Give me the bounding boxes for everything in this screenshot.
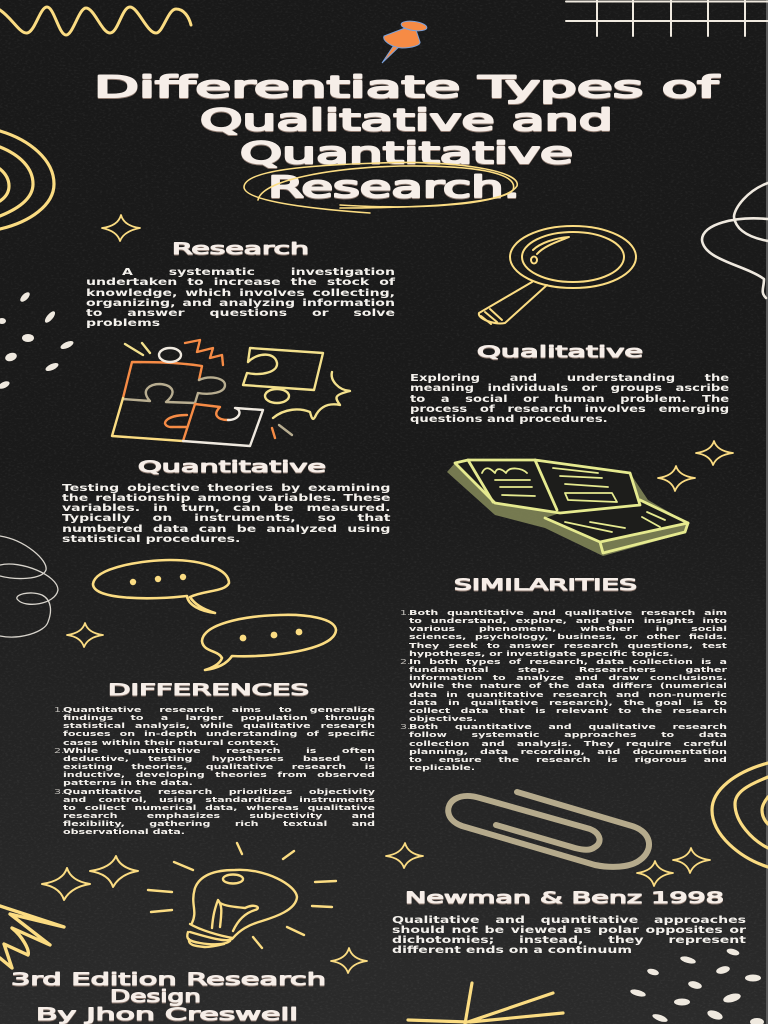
text: differences list: existing theories, qualitative research is	[63, 762, 375, 771]
text: differences list: deductive, testing hypotheses based on	[63, 754, 375, 763]
text: qualitative definition: process of research involves emerging	[410, 404, 729, 415]
text: 3.	[54, 787, 65, 796]
icon: jigsaw puzzle	[112, 340, 350, 446]
text: quantitative definition: Testing objective theories by examining	[62, 482, 390, 494]
icon: white dashes left	[0, 291, 75, 390]
text: similarities list: various phenomena, whether in social	[409, 624, 727, 633]
speech bubble upper	[93, 560, 229, 613]
text: differences list	[54, 705, 375, 836]
text: qualitative definition: to a social or human problem. The	[410, 394, 729, 405]
text: quantitative definition: variables. in turn, can be measured.	[62, 503, 390, 514]
text: similarities list	[400, 608, 727, 772]
title: Differentiate Types of	[94, 70, 720, 104]
icon: orange push pin	[382, 20, 427, 63]
heading: book credit	[11, 970, 326, 1024]
icon: yellow scribble bottom left	[0, 906, 64, 968]
text: differences list: to collect numerical data, whereas qualitative	[63, 803, 375, 812]
text: differences list: patterns in the data.	[63, 778, 193, 787]
text: similarities list: information to analyze and draw conclusions.	[409, 673, 727, 682]
text: similarities list: sciences, psychology, business, or other fields.	[409, 632, 727, 641]
icon: magnifying glass	[479, 226, 636, 324]
text: similarities list: They seek to answer research questions, test	[409, 641, 727, 650]
heading: book credit: 3rd Edition Research	[11, 970, 326, 990]
text: Newman and Benz note: Qualitative and quantitative approaches	[392, 914, 746, 926]
text: similarities list: In both types of research, data collection is a	[409, 657, 727, 666]
heading: Differences: DIFFERENCES	[108, 680, 309, 699]
text: 2.	[400, 657, 411, 666]
text: research definition: problems	[86, 318, 160, 329]
title: Quantitative	[240, 136, 573, 170]
text: quantitative definition: the relationship among variables. These	[62, 493, 390, 504]
text: differences list: Quantitative research aims to generalize	[63, 705, 375, 714]
text: quantitative definition: numbered data can be analyzed using	[62, 524, 390, 535]
text: differences list: focuses on in-depth understanding of specific	[63, 729, 375, 738]
text: research definition: organizing, and analyzing information	[86, 298, 395, 309]
icon: concentric arcs left	[0, 131, 54, 229]
text: qualitative definition: meaning individuals or groups ascribe	[410, 383, 729, 394]
speech bubble lower	[202, 615, 336, 670]
text: similarities list: collection and analysis. They require careful	[409, 738, 727, 748]
icon: light bulb	[148, 843, 336, 948]
text: similarities list: to ensure the research is rigorous and	[409, 755, 727, 764]
text: Newman and Benz note	[392, 914, 746, 956]
text: similarities list: Both quantitative and qualitative research	[409, 722, 727, 731]
text: differences list: cases within their natural context.	[63, 738, 279, 747]
title	[94, 70, 720, 204]
text: Newman and Benz note: dichotomies; instead, they represent	[392, 935, 746, 946]
text: quantitative definition: Typically on instruments, so that	[62, 513, 390, 524]
heading: Quantitative: Quantitative	[138, 457, 326, 476]
icon: white scribble right	[702, 183, 768, 298]
text: similarities list: replicable.	[409, 763, 475, 772]
text: similarities list: fundamental step. Researchers gather	[409, 665, 727, 674]
text: qualitative definition: questions and procedures.	[410, 414, 608, 425]
icon: burst lines bottom	[408, 983, 563, 1024]
text: similarities list: objectives.	[409, 714, 477, 723]
text: 1.	[54, 705, 65, 714]
scribble circle around Research	[244, 162, 517, 213]
text: differences list: findings to a larger population through	[63, 713, 375, 722]
text: differences list: flexibility, gathering rich textual and	[63, 819, 375, 828]
text: research definition: to answer questions or solve	[86, 308, 395, 319]
icon: sparkle stars	[42, 215, 733, 973]
icon: thin white scribble left	[0, 536, 58, 637]
text: differences list: research emphasizes subjectivity and	[63, 811, 375, 820]
text: differences list: While quantitative research is often	[63, 746, 375, 755]
text: similarities list: follow systematic approaches to data	[409, 730, 727, 739]
text: similarities list: data in qualitative research), the goal is to	[409, 698, 727, 707]
text: similarities list: While the nature of the data differs (numerical	[409, 681, 727, 690]
text: Newman and Benz note: should not be viewed as polar opposites or	[392, 925, 746, 936]
text: 2.	[54, 746, 65, 755]
text: quantitative definition: statistical procedures.	[62, 534, 240, 545]
text: research definition: knowledge, which involves collecting,	[86, 288, 395, 299]
text: differences list: inductive, developing theories from observed	[63, 770, 375, 779]
icon: concentric arcs right	[712, 763, 768, 867]
heading: Newman and Benz 1998: Newman & Benz 1998	[405, 888, 724, 907]
text: similarities list: data in quantitative research and non-numeric	[409, 690, 727, 699]
text: similarities list: hypotheses, or investigate specific topics.	[409, 649, 673, 658]
text: differences list: statistical analysis, while qualitative research	[63, 721, 375, 730]
icon: grid top right	[566, 0, 768, 36]
text: similarities list: planning, data recording, and documentation	[409, 747, 727, 756]
title: Qualitative and	[200, 103, 613, 137]
text: Newman and Benz note: different ends on a continuum	[392, 945, 632, 956]
text: qualitative definition: Exploring and understanding the	[410, 373, 729, 384]
heading: book credit: Design	[110, 987, 201, 1007]
heading: Similarities: SIMILARITIES	[454, 575, 637, 594]
text: differences list: observational data.	[63, 827, 185, 836]
heading: Research: Research	[172, 239, 309, 258]
icon: zigzag top left	[0, 7, 191, 35]
icon: white dashes bottom right	[629, 947, 764, 1024]
text: 1.	[400, 608, 411, 617]
text: qualitative definition	[410, 373, 729, 425]
text: research definition: undertaken to increase the stock of	[86, 277, 395, 288]
text: quantitative definition	[62, 482, 390, 545]
title: Research.	[268, 170, 520, 204]
text: similarities list: to understand, explore, and gain insights into	[409, 616, 727, 625]
text: 3.	[400, 722, 411, 731]
icon: open books	[447, 460, 688, 556]
text: research definition: A systematic investigation	[122, 267, 395, 278]
heading: Qualitative: Qualitative	[477, 342, 643, 361]
text: research definition	[86, 267, 396, 329]
text: differences list: and control, using standardized instruments	[63, 795, 375, 804]
text: similarities list: Both quantitative and qualitative research aim	[409, 608, 727, 617]
text: similarities list: collect data that is relevant to the research	[409, 706, 727, 715]
text: differences list: Quantitative research prioritizes objectivity	[63, 787, 375, 796]
icon: paper clip	[448, 792, 649, 867]
